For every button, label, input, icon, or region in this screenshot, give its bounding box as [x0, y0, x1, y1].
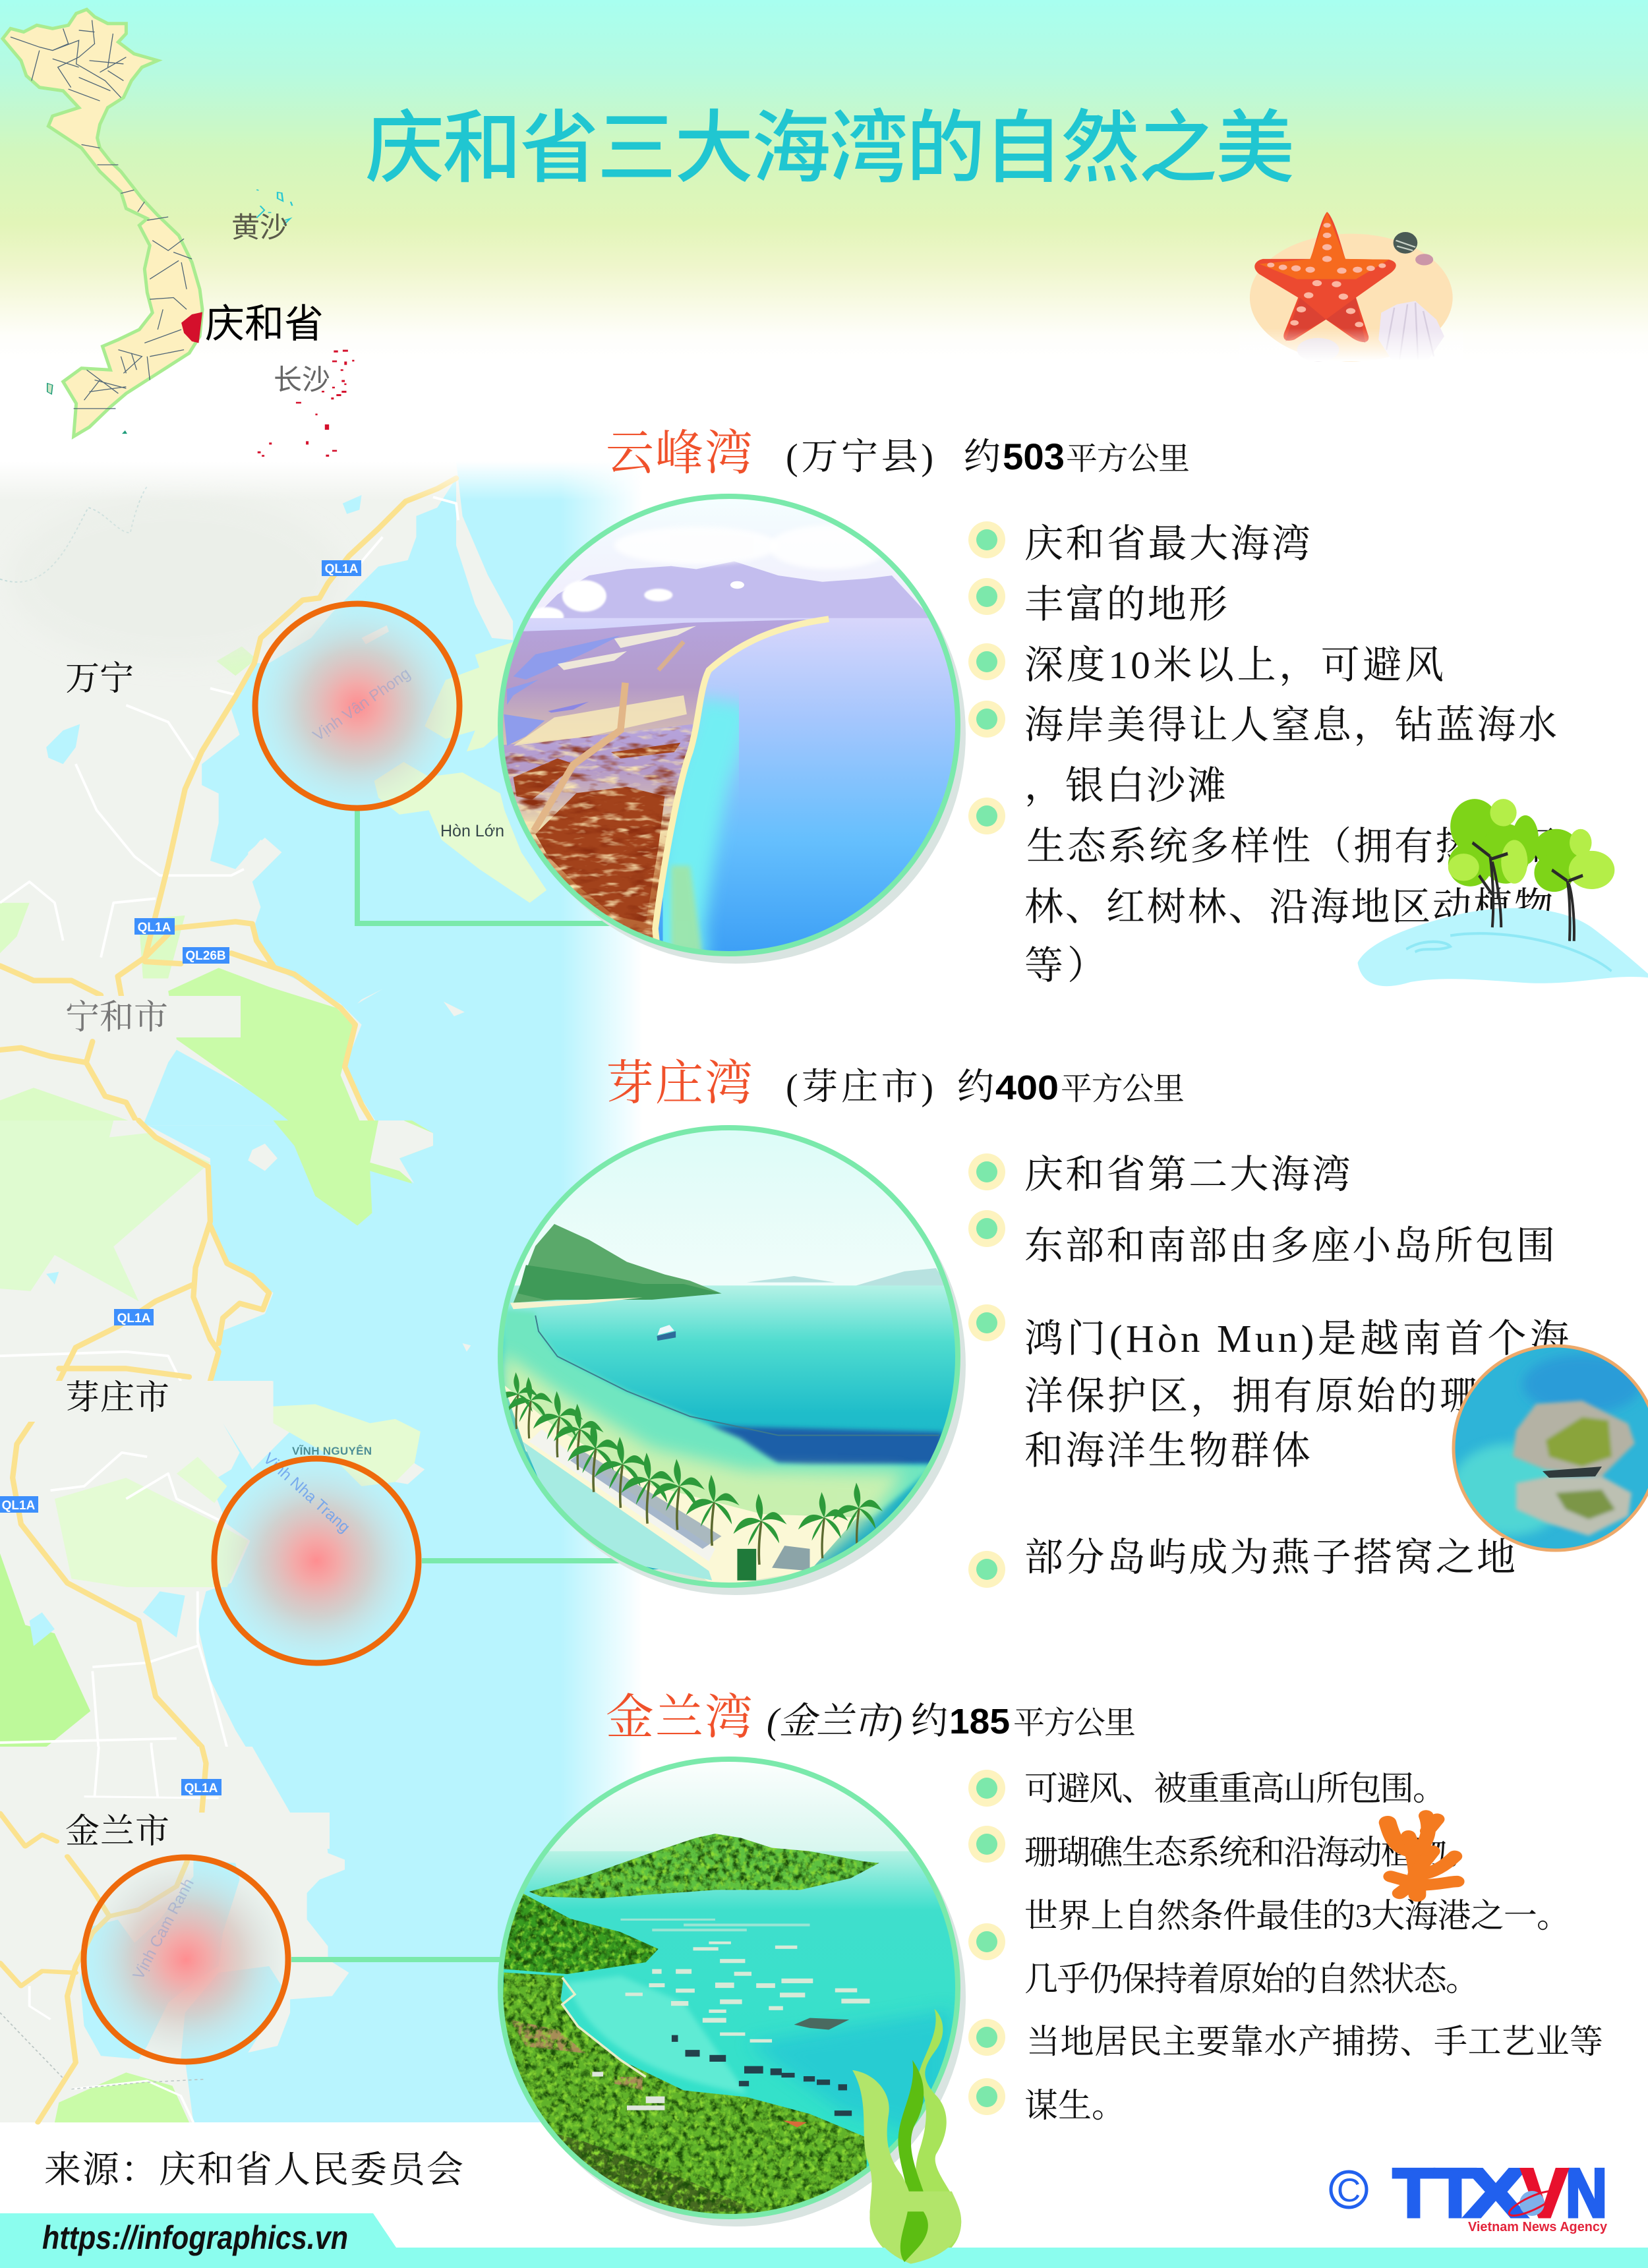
text: Cam Ranh facts: [1024, 1771, 1603, 2125]
map place labels: [0, 651, 504, 1853]
marker: Nha Trang bay: Vịnh Nha Trang: [260, 1449, 353, 1536]
logo: TTXVN: N: [1566, 2155, 1607, 2232]
section heading: Van Phong: 约: [964, 437, 1001, 478]
text: Van Phong facts: 丰富的地形: [1024, 583, 1227, 626]
road badges: [0, 560, 361, 1795]
icon: starfish and shells: [1239, 212, 1463, 361]
section heading: Cam Ranh: 约: [911, 1701, 948, 1742]
text: Van Phong facts: 海岸美得让人窒息，钻蓝海水: [1024, 703, 1557, 747]
section heading: Nha Trang: 400: [995, 1069, 1059, 1107]
section heading: Cam Ranh: 金兰湾: [606, 1678, 753, 1747]
section heading: Van Phong: [606, 414, 1190, 483]
text: Nha Trang facts: 洋保护区，拥有原始的珊瑚礁: [1024, 1374, 1563, 1418]
text: Cam Ranh facts: 几乎仍保持着原始的自然状态。: [1024, 1962, 1479, 1998]
text: Van Phong facts: [1024, 522, 1557, 987]
logo: TTXVN: TT: [1393, 2155, 1476, 2232]
road badges: QL1A: [138, 921, 171, 935]
logo: TTXVN: [1393, 2155, 1608, 2234]
photo circle: Nha Trang bay: [494, 1126, 968, 1595]
land north section: [0, 461, 546, 1126]
footer source: 来源：庆和省人民委员会: [44, 2150, 463, 2191]
text: Van Phong facts: 林、红树林、沿海地区动植物: [1024, 885, 1553, 929]
text: Nha Trang facts: 和海洋生物群体: [1024, 1429, 1310, 1472]
text: Van Phong facts: 深度10米以上，可避风: [1024, 643, 1444, 687]
section heading: Cam Ranh: (金兰市): [767, 1701, 902, 1742]
text: Cam Ranh facts: 可避风、被重重高山所包围。: [1024, 1771, 1446, 1808]
icon: seaweed over footer: [869, 2192, 961, 2264]
logo: TTXVN: Vietnam News Agency: [1468, 2220, 1608, 2234]
section heading: Cam Ranh: 平方公里: [1013, 1706, 1136, 1741]
map place labels: Hòn Lớn: [440, 822, 504, 840]
map of Vietnam: 长沙: [274, 357, 330, 398]
map place labels: 芽庄市: [65, 1370, 169, 1419]
logo: TTXVN: V: [1521, 2155, 1568, 2232]
road badges: QL1A: [325, 562, 359, 576]
logo: copyright mark: [1331, 2172, 1367, 2209]
text: Nha Trang facts: 鸿门(Hòn Mun)是越南首个海: [1024, 1317, 1569, 1360]
text: Nha Trang facts: 东部和南部由多座小岛所包围: [1024, 1224, 1555, 1267]
photo: Hon Mun island: [1450, 1345, 1648, 1556]
map of Vietnam: 黄沙: [231, 205, 288, 246]
section heading: Nha Trang: [606, 1044, 1185, 1113]
text: Nha Trang facts: 部分岛屿成为燕子搭窝之地: [1024, 1536, 1516, 1579]
text: Van Phong facts: 生态系统多样性（拥有热带雨: [1026, 825, 1556, 868]
road badges: QL26B: [185, 949, 226, 963]
land south section: [0, 1747, 349, 2122]
map place labels: 宁和市: [65, 989, 168, 1039]
photo circle: Cam Ranh bay: [494, 1753, 968, 2226]
text: Nha Trang facts: 庆和省第二大海湾: [1024, 1153, 1351, 1196]
text: Nha Trang facts: [1024, 1153, 1569, 1579]
text: Cam Ranh facts: 珊瑚礁生态系统和沿海动植物。: [1024, 1835, 1479, 1872]
marker: Cam Ranh bay: [84, 1857, 288, 2062]
map of Vietnam: [3, 9, 354, 457]
text: Van Phong facts: 庆和省最大海湾: [1024, 522, 1310, 566]
text: Cam Ranh facts: 世界上自然条件最佳的3大海港之一。: [1024, 1898, 1570, 1935]
road badges: QL1A: [2, 1499, 36, 1513]
marker: Cam Ranh bay: Vịnh Cam Ranh: [129, 1876, 198, 1983]
map place labels: 金兰市: [65, 1803, 169, 1853]
marker: Van Phong bay: Vịnh Vân Phong: [310, 664, 414, 745]
logo: TTXVN: X: [1465, 2155, 1527, 2232]
photo circle: Van Phong bay: [494, 494, 968, 964]
map place labels: 万宁: [65, 651, 134, 700]
bullets: Cam Ranh: [968, 1770, 1005, 2115]
section heading: Van Phong: (万宁县): [786, 437, 933, 478]
bullets: Van Phong: [968, 521, 1005, 834]
section heading: Van Phong: 503: [1003, 436, 1065, 477]
section heading: Van Phong: 云峰湾: [606, 414, 753, 483]
connector lines: [291, 811, 659, 1960]
bullets: Nha Trang: [968, 1153, 1005, 1588]
section heading: Van Phong: 平方公里: [1066, 442, 1190, 477]
text: Cam Ranh facts: 谋生。: [1024, 2088, 1125, 2125]
section heading: Nha Trang: 芽庄湾: [606, 1044, 753, 1113]
section heading: Nha Trang: (芽庄市): [786, 1067, 933, 1108]
text: Cam Ranh facts: 当地居民主要靠水产捕捞、手工艺业等: [1026, 2024, 1603, 2061]
section heading: Nha Trang: 约: [957, 1067, 994, 1108]
map place labels: VĨNH NGUYÊN: [292, 1444, 372, 1457]
road badges: QL1A: [185, 1782, 218, 1795]
marker: Nha Trang bay: [214, 1449, 419, 1663]
road badges: QL1A: [117, 1312, 151, 1325]
panel: background map: [0, 461, 659, 2122]
logo: copyright mark: C: [1337, 2172, 1361, 2209]
footer band: https://infographics.vn: [42, 2219, 348, 2256]
text: Van Phong facts: 等）: [1024, 944, 1106, 987]
section heading: Cam Ranh: [606, 1678, 1136, 1747]
land central section: [0, 1120, 471, 1785]
marker: Van Phong bay: [255, 604, 459, 808]
icon: seaweed: [852, 2009, 961, 2267]
section heading: Nha Trang: 平方公里: [1061, 1072, 1185, 1107]
text: Van Phong facts: ，银白沙滩: [1024, 764, 1226, 807]
fade of map to page: [560, 461, 643, 2122]
footer band: [0, 2213, 1648, 2268]
title: 庆和省三大海湾的自然之美: [365, 84, 1295, 198]
icon: trees on water: [1358, 799, 1648, 986]
header gradient band: [0, 0, 1648, 361]
icon: coral: [1388, 1816, 1457, 1895]
map of Vietnam: 庆和省: [205, 292, 324, 349]
section heading: Cam Ranh: 185: [949, 1702, 1010, 1741]
